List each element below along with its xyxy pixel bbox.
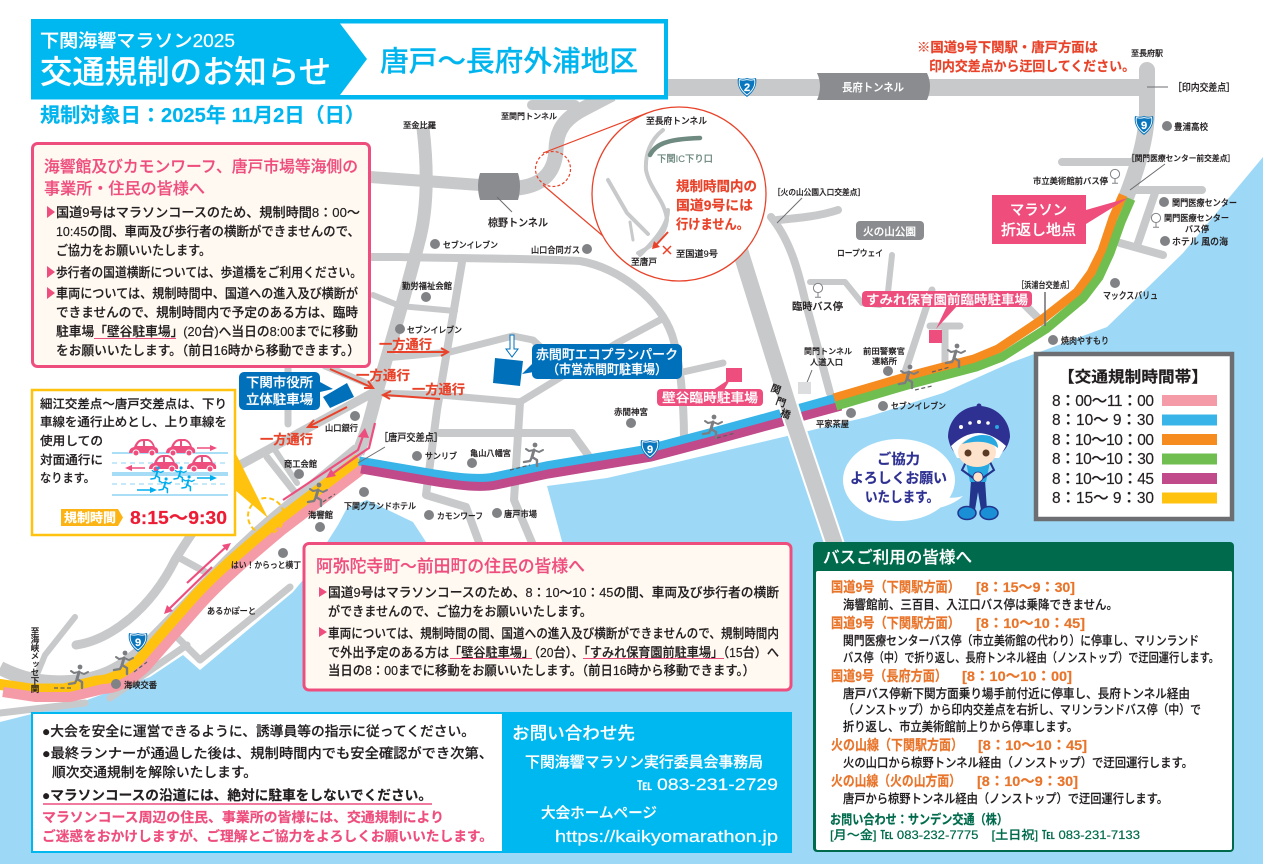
panel: bus users notice: 火の山口から椋野トンネル経由（ノンストップ）で迂回運行します。 bbox=[843, 756, 1193, 770]
panel: contact information: ℡ bbox=[637, 778, 652, 793]
mascot speech bubble: よろしくお願い bbox=[850, 470, 947, 486]
parking label: Akamamachi Eco Plan Park: （市営赤間町駐車場） bbox=[547, 362, 667, 377]
map labels: Hinoyama area: 前田警察官 bbox=[863, 346, 905, 356]
map labels: north-east: バス停 bbox=[1185, 224, 1209, 234]
inset circle: Shimonoseki IC detail: 下関IC下り口 bbox=[657, 154, 713, 165]
panel: legend of regulated time slots: 8：10～10：45 bbox=[1052, 471, 1154, 488]
panel: legend of regulated time slots bbox=[1036, 354, 1232, 519]
map labels: north-east: ［印内交差点］ bbox=[1173, 81, 1235, 94]
map labels: north-east: 関門医療センター bbox=[1172, 197, 1237, 208]
panel: bus users notice: 海響館前、三百目、入江口バス停は乗降できません。 bbox=[843, 597, 1118, 612]
panel: bus users notice: 火の山線（下関駅方面） bbox=[831, 737, 963, 753]
regulated time tag: 8:15～9:30 bbox=[130, 508, 227, 528]
panel: contraflow callout: なります。 bbox=[40, 471, 95, 485]
map labels: north-east: 関門医療センター bbox=[1164, 213, 1229, 223]
mascot speech bubble: いたします。 bbox=[865, 489, 939, 505]
lane illustration bbox=[112, 439, 228, 495]
Kanmon bridge road bbox=[740, 250, 835, 545]
target date: 規制対象日：2025年 11月2日（日） bbox=[40, 103, 365, 127]
panel: contraflow callout: 対面通行に bbox=[40, 452, 103, 467]
map labels: north-east: 豊浦高校 bbox=[1174, 121, 1208, 132]
panel: seaside residents notice: 駐車場「壁谷駐車場」(20台)へ当日の8:00までに移動 bbox=[56, 324, 358, 339]
panel: general notes: 順次交通規制を解除いたします。 bbox=[52, 764, 257, 780]
map labels: central bbox=[344, 112, 648, 521]
map labels: west: はい！からっと横丁 bbox=[231, 560, 301, 570]
one-way arrows: 一方通行 bbox=[412, 382, 465, 397]
map labels: west: 商工会館 bbox=[284, 459, 317, 469]
inset circle: Shimonoseki IC detail: 国道9号には bbox=[676, 197, 754, 213]
map labels: central: 唐戸市場 bbox=[504, 509, 537, 519]
parking label: Sumire nursery: すみれ保育園前臨時駐車場 bbox=[866, 292, 1029, 307]
panel: seaside residents notice: 歩行者の国道横断については、歩道橋をご利用ください。 bbox=[56, 265, 362, 280]
map labels: west: 至海峡メッセ下関 bbox=[30, 627, 40, 694]
map labels: Hinoyama area: 火の山公園 bbox=[863, 226, 916, 238]
panel: seaside residents notice: 事業所・住民の皆様へ bbox=[44, 180, 205, 198]
map labels: central: 山口合同ガス bbox=[531, 245, 580, 255]
route shields: 9 bbox=[1141, 120, 1147, 132]
map labels: central: 至金比羅 bbox=[403, 120, 436, 130]
contraflow arrows on road bbox=[164, 423, 375, 614]
panel: general notes: ご迷惑をおかけしますが、ご理解とご協力をよろしくお願いいたします。 bbox=[42, 828, 493, 844]
map labels: central: カモンワーフ bbox=[437, 511, 483, 521]
course: blue and purple sections bbox=[359, 398, 841, 486]
panel: legend of regulated time slots: 【交通規制時間帯】 bbox=[1058, 368, 1208, 386]
map labels: west: 海峡交番 bbox=[124, 680, 157, 690]
map labels: north-east: ホテル 風の海 bbox=[1172, 236, 1228, 248]
mascot speech bubble: ご協力 bbox=[877, 451, 920, 467]
panel: contraflow callout: 細江交差点～唐戸交差点は、下り bbox=[40, 396, 227, 411]
parking label: Kabeya: 壁谷臨時駐車場 bbox=[662, 390, 759, 405]
map labels: central: 亀山八幡宮 bbox=[470, 448, 511, 458]
map labels: central: ［唐戸交差点］ bbox=[379, 431, 443, 444]
map labels: north-east: マックスバリュ bbox=[1103, 291, 1158, 302]
tunnel: Nagafu bbox=[817, 73, 930, 100]
panel: contact information: お問い合わせ先 bbox=[512, 724, 635, 743]
panel: Amidaji to Maeda residents notice: 国道9号はマラソンコースのため、8：10～10：45の間、車両及び歩行者の横断 bbox=[328, 585, 779, 600]
map labels: west: 海響館 bbox=[308, 510, 333, 520]
parking label: Sumire nursery bbox=[862, 291, 1032, 343]
route shields: 9 bbox=[135, 637, 141, 649]
panel: bus users notice: [8：10～9：30] bbox=[977, 773, 1078, 789]
panel: bus users notice bbox=[813, 542, 1234, 852]
panel: contact information bbox=[512, 724, 778, 846]
header banner: 交通規制のお知らせ bbox=[40, 54, 331, 90]
yellow pointer and dashed circle bbox=[235, 452, 284, 534]
panel: seaside residents notice bbox=[32, 144, 370, 366]
inset circle: Shimonoseki IC detail: 至長府トンネル bbox=[646, 116, 707, 126]
panel: seaside residents notice: をお願いいたします。（前日16時から移動できます。） bbox=[56, 343, 360, 358]
panel: bus users notice: 関門医療センターバス停（市立美術館の代わり）に停車し、マリンランド bbox=[843, 633, 1199, 648]
route shields bbox=[129, 78, 1153, 652]
panel: legend of regulated time slots: 8：10～10：00 bbox=[1052, 432, 1154, 449]
map labels: Hinoyama area: 人道入口 bbox=[810, 357, 843, 367]
map labels: central: セブンイレブン bbox=[407, 325, 462, 335]
panel: seaside residents notice: 海響館及びカモンワーフ、唐戸市場等海側の bbox=[44, 158, 358, 176]
map labels: central: 下関グランドホテル bbox=[344, 501, 416, 511]
parking label: Akamamachi Eco Plan Park: 赤間町エコプランパーク bbox=[536, 347, 678, 362]
map labels: central: 至関門トンネル bbox=[501, 112, 557, 121]
regulated time tag bbox=[61, 508, 227, 528]
map labels: Hinoyama area: ［火の山公園入口交差点］ bbox=[773, 187, 865, 197]
route shields: 9 bbox=[647, 444, 653, 456]
detour note bbox=[917, 39, 1135, 74]
tunnel: Mukuno: 椋野トンネル bbox=[488, 217, 548, 229]
map labels: north-east: 市立美術館前バス停 bbox=[1033, 176, 1108, 186]
road network bbox=[0, 70, 1202, 713]
panel: general notes: ●マラソンコースの沿道には、絶対に駐車をしないでください。 bbox=[42, 787, 432, 803]
panel: legend of regulated time slots: 8：15～ 9：30 bbox=[1052, 490, 1154, 507]
parking label: Kabeya bbox=[657, 368, 763, 406]
header banner bbox=[31, 19, 668, 100]
map labels: Hinoyama area: 関門トンネル bbox=[804, 347, 852, 356]
map labels: Hinoyama area: 連絡所 bbox=[872, 356, 897, 366]
panel: bus users notice: 国道9号（長府方面） bbox=[831, 668, 947, 684]
panel: bus users notice: 国道9号（下関駅方面） bbox=[831, 579, 960, 595]
regulated time tag: 規制時間 bbox=[64, 510, 116, 525]
panel: bus users notice: [8：15～9：30] bbox=[976, 579, 1075, 595]
panel: contact information: 大会ホームページ bbox=[541, 805, 657, 822]
panel: bus users notice: [8：10～10：45] bbox=[978, 737, 1087, 753]
map labels: central: 勤労福祉会館 bbox=[402, 281, 452, 291]
panel: seaside residents notice: できませんので、規制時間内で予定のある方は、臨時 bbox=[56, 305, 358, 320]
panel: bus users notice: 火の山線（火の山方面） bbox=[831, 773, 961, 789]
panel: legend of regulated time slots: 8：00～11：00 bbox=[1052, 393, 1154, 410]
inset circle: Shimonoseki IC detail: 至唐戸 bbox=[631, 256, 657, 267]
mascot character bbox=[948, 404, 1010, 520]
map labels: west bbox=[30, 411, 360, 694]
map labels: west: 山口銀行 bbox=[325, 423, 358, 433]
detour note: 印内交差点から迂回してください。 bbox=[929, 58, 1135, 74]
panel: Amidaji to Maeda residents notice: 車両については、規制時間の間、国道への進入及び横断ができませんので、規制時間内 bbox=[328, 626, 779, 641]
panel: legend of regulated time slots: 8：10～10：30 bbox=[1052, 451, 1154, 468]
panel: contraflow callout: 車線を通行止めとし、上り車線を bbox=[40, 414, 227, 429]
one-way arrows: 一方通行 bbox=[260, 432, 313, 447]
panel: contact information: 083-231-2729 bbox=[657, 775, 778, 794]
map labels: Hinoyama area: 関 bbox=[769, 382, 782, 397]
parking label: Akamamachi Eco Plan Park bbox=[493, 335, 682, 386]
map labels: Hinoyama area: 門 bbox=[774, 395, 787, 410]
mascot speech bubble bbox=[843, 439, 963, 521]
course: yellow and pink sections bbox=[0, 459, 365, 697]
panel: Amidaji to Maeda residents notice: 当日の8：00までに移動をお願いいたします。（前日16時から移動できます。） bbox=[328, 663, 755, 678]
map labels: central: サンリブ bbox=[425, 451, 457, 461]
map labels: Hinoyama area: 橋 bbox=[779, 406, 792, 422]
panel: bus users notice: 唐戸から椋野トンネル経由（ノンストップ）で迂回運行します。 bbox=[843, 791, 1168, 806]
panel: seaside residents notice: ご協力をお願いいたします。 bbox=[56, 243, 211, 258]
panel: Amidaji to Maeda residents notice: ができませんので、ご協力をお願いいたします。 bbox=[328, 604, 592, 619]
map labels: north-east bbox=[1017, 49, 1237, 346]
one-way arrows: 一方通行 bbox=[356, 368, 410, 383]
map labels: west: あるかぽーと bbox=[207, 606, 256, 616]
header banner: 唐戸～長府外浦地区 bbox=[380, 46, 638, 78]
map labels: Hinoyama area bbox=[769, 187, 946, 429]
callout: marathon turning point bbox=[992, 195, 1128, 244]
panel: seaside residents notice: 10:45の間、車両及び歩行者の横断ができませんので、 bbox=[56, 224, 360, 239]
map labels: Hinoyama area: セブンイレブン bbox=[891, 401, 946, 411]
runners on course bbox=[54, 344, 965, 688]
inset circle: Shimonoseki IC detail: 規制時間内の bbox=[676, 178, 757, 194]
inset circle: Shimonoseki IC detail: 行けません。 bbox=[676, 217, 749, 232]
panel: general notes: ●大会を安全に運営できるように、誘導員等の指示に従ってください。 bbox=[42, 723, 475, 739]
callout: marathon turning point: マラソン bbox=[1010, 203, 1067, 219]
course: orange and green sections bbox=[834, 195, 1131, 406]
map labels: Hinoyama area: ロープウェイ bbox=[837, 248, 883, 258]
panel: general notes bbox=[31, 712, 792, 853]
panel: bus users notice: [8：10～10：45] bbox=[976, 615, 1085, 631]
parking label: city hall: 下関市役所 bbox=[246, 375, 313, 390]
panel: contraflow callout: 使用しての bbox=[40, 433, 103, 448]
panel: bus users notice: （ノンストップ）から印内交差点を右折し、マリンランドバス停（中）で bbox=[843, 702, 1201, 717]
panel: bus users notice: [月～金] ℡ 083-232-7775 [土日祝] ℡ 083-231-7133 bbox=[830, 827, 1140, 842]
panel: seaside residents notice: 車両については、規制時間中、国道への進入及び横断が bbox=[56, 286, 358, 301]
map labels: Hinoyama area: 臨時バス停 bbox=[792, 300, 843, 313]
panel: legend of regulated time slots: 8：10～ 9：30 bbox=[1052, 412, 1154, 429]
panel: bus users notice: [8：10～10：00] bbox=[962, 668, 1072, 684]
panel: bus users notice: 国道9号（下関駅方面） bbox=[831, 615, 960, 631]
map labels: Hinoyama area: 平家茶屋 bbox=[816, 419, 849, 429]
panel: contraflow callout bbox=[32, 390, 235, 535]
panel: general notes: マラソンコース周辺の住民、事業所の皆様には、交通規制により bbox=[42, 809, 444, 825]
panel: Amidaji to Maeda residents notice: 阿弥陀寺町～前田町の住民の皆様へ bbox=[316, 557, 585, 576]
panel: Amidaji to Maeda residents notice: で外出予定のある方は「壁谷駐車場」（20台）、「すみれ保育園前駐車場」（15台）へ bbox=[328, 645, 779, 660]
inset circle: Shimonoseki IC detail: 至国道9号 bbox=[676, 248, 718, 259]
callout: marathon turning point: 折返し地点 bbox=[1001, 222, 1076, 239]
map labels: north-east: ［浜浦台交差点］ bbox=[1017, 280, 1074, 290]
one-way arrows bbox=[260, 337, 465, 447]
panel: general notes: ●最終ランナーが通過した後は、規制時間内でも安全確認ができ次第、 bbox=[42, 745, 493, 761]
panel: bus users notice: 唐戸バス停新下関方面乗り場手前付近に停車し、長府トンネル経由 bbox=[843, 686, 1190, 701]
map labels: central: セブンイレブン bbox=[443, 240, 498, 250]
one-way arrows: 一方通行 bbox=[379, 337, 432, 352]
parking label: city hall bbox=[239, 372, 354, 410]
panel: seaside residents notice: 国道9号はマラソンコースのため、規制時間8：00～ bbox=[56, 205, 360, 220]
detour note: ※国道9号下関駅・唐戸方面は bbox=[917, 39, 1098, 55]
panel: contact information: https://kaikyomarathon.jp bbox=[555, 827, 778, 846]
inset circle: Shimonoseki IC detail bbox=[536, 107, 766, 281]
panel: bus users notice: バスご利用の皆様へ bbox=[823, 548, 972, 567]
panel: bus users notice: お問い合わせ：サンデン交通（株） bbox=[830, 812, 1008, 827]
map labels: central: 赤間神宮 bbox=[614, 407, 648, 417]
map labels: north-east: ［関門医療センター前交差点］ bbox=[1127, 153, 1235, 163]
panel: bus users notice: 折り返し、市立美術館前上りから停車します。 bbox=[843, 719, 1078, 734]
map labels: north-east: 焼肉やすもり bbox=[1061, 335, 1109, 346]
parking label: city hall: 立体駐車場 bbox=[246, 392, 313, 407]
map labels: north-east: 至長府駅 bbox=[1131, 49, 1163, 58]
tunnel: Mukuno bbox=[478, 173, 548, 229]
header banner: 下関海響マラソン2025 bbox=[40, 31, 235, 51]
panel: Amidaji to Maeda residents notice bbox=[304, 544, 791, 690]
tunnel: Nagafu: 長府トンネル bbox=[842, 81, 904, 94]
panel: contact information: 下関海響マラソン実行委員会事務局 bbox=[525, 754, 763, 771]
route shields: 2 bbox=[744, 82, 750, 94]
